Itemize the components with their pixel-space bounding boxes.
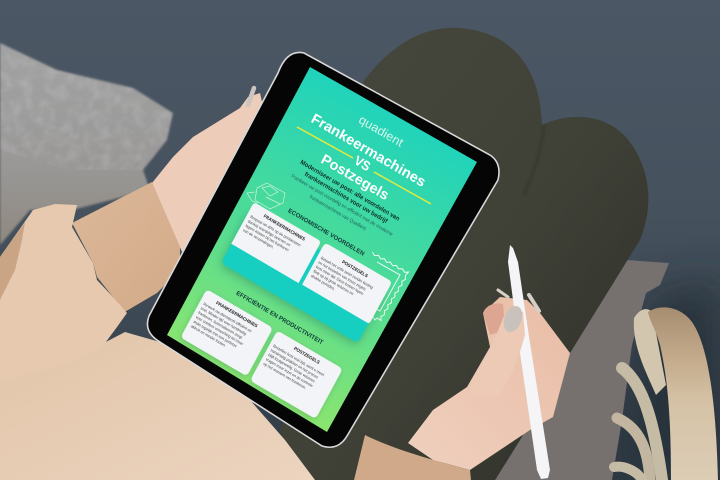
card body: Bespaar tot 40% op de portokosten [249,215,301,248]
infographic content in tablet plane [179,105,444,420]
card heading: POSTZEGELS [293,346,321,365]
card body: dankzij voordelige tarieven en [247,219,291,247]
icon: franking machine [247,183,285,209]
dark floor behind chair [620,280,720,480]
section heading: efficientie en productiviteit: EFFICIËNTIE EN PRODUCTIVITEIT [235,290,325,347]
section heading: economische voordelen: ECONOMISCHE VOORDELEN [287,208,365,258]
panel: teal band economic [221,209,387,343]
card body: frankeren. Automatiseren zorgt [197,311,244,340]
bunched sweater sleeve [0,204,127,382]
card body: afdruk en minder fouten. [190,324,227,348]
thumb over pencil [470,306,525,395]
card heading: FRANKEERMACHINES [263,213,306,242]
card body: kost meer tijd. Deze kosten lopen [315,265,364,296]
thumb nail [500,303,526,335]
olive trousers [280,28,648,480]
title: VS: VS [352,152,374,174]
intro text: Frankeer uw post voordelig en efficiënt met de moderne [290,173,394,238]
nail: fingers [498,290,508,297]
tablet body [147,52,499,447]
sleeve shadow [0,222,25,300]
thumb nail left [248,88,254,105]
sweater cuff at pencil wrist [354,435,471,480]
card body: Betaalt het volle tarief zonder korting [320,256,374,290]
nail: index [529,295,539,311]
grey cushion [495,260,669,480]
yellow divider left [297,127,353,158]
icon: postage stamp [370,252,408,320]
yellow divider right [374,172,431,204]
card body [310,256,374,308]
card body [190,302,252,356]
card body: drukke periodes. [310,274,336,291]
card: postzegels economisch [302,242,392,324]
card heading: POSTZEGELS [341,259,369,278]
main arm [648,307,718,480]
subtitle: Moderniseer uw post: alle voordelen van [299,159,401,223]
knee seam [524,125,544,195]
digital pencil [508,245,550,479]
sweater ribbed cuff [72,182,180,313]
finger shadow [483,303,505,335]
curved rod 3 [614,467,642,480]
curved rod 2 [617,418,650,480]
sweater body [0,332,315,480]
tablet screen [167,67,477,432]
card body: flink op bij grote volumes en [313,269,354,296]
card body: snel. Minder tijd voor handmatig [200,306,247,336]
card: frankeermachines efficientie [180,289,273,376]
wicker chair [614,307,718,480]
subtitle line 2: frankeermachines voor uw bedrijf [303,171,389,226]
card: frankeermachines economisch [231,202,321,283]
holding hand [152,88,265,252]
card body: Bestellen kost veel tijd, want u moet [272,344,326,378]
card body [263,344,326,396]
pencil-holding hand [408,290,570,470]
card heading: FRANKEERMACHINES [215,300,258,329]
card body [242,215,301,261]
card body: stuks tegelijk met een perfecte [192,320,237,348]
card body: lagere kosten bij het frankeren [245,224,289,252]
card: postzegels efficientie [250,330,343,419]
title: Frankeermachines: Frankeermachines [309,111,429,190]
logo: quadient: quadient [356,112,407,150]
grey rug [0,43,173,245]
card body: vragen meer inzet en de controle [265,357,313,388]
card body: handmatig plakken en het proces [270,348,319,380]
card body: op het moment van frankeren. [263,362,307,390]
card body: blijft foutgevoelig. Grote volumes [267,353,316,384]
curved rod 1 [622,368,662,480]
card body: van de verzendingen. [242,228,275,250]
inner cane [634,309,666,395]
card body: voor snellere verwerking tot meer [195,315,245,347]
card body: Verwerk uw dienstpost efficiënt en [202,302,252,333]
intro text line 2: frankeermachines van Quadient [308,194,367,233]
card body: en het bestellen van losse zegels [318,260,366,292]
title: Postzegels: Postzegels [318,151,392,203]
